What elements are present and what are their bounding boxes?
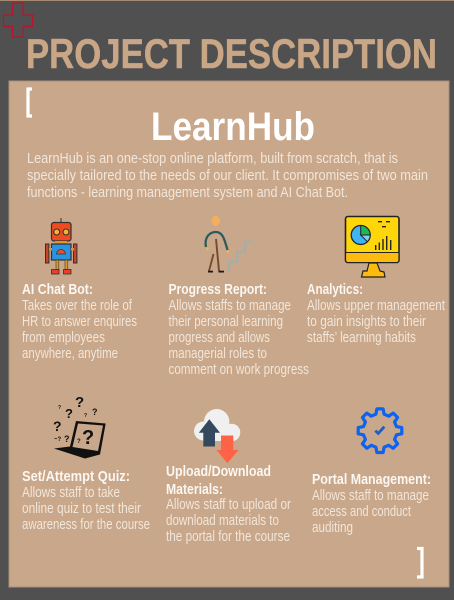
text block: Set/Attempt Quiz: Allows staff to take — [22, 485, 120, 501]
icon: person climbing stairs — [206, 216, 254, 272]
text block: Set/Attempt Quiz — [22, 468, 150, 533]
text block: Upload/Download Materials: download materials to — [166, 513, 279, 529]
text block: Set/Attempt Quiz: online quiz to test their — [22, 501, 141, 517]
text block: Analytics: Analytics: — [307, 281, 363, 298]
text block: Set/Attempt Quiz: Set/Attempt Quiz: — [22, 468, 130, 485]
text block: Progress Report: Allows staffs to manage — [168, 298, 291, 314]
icon: laptop with question marks: ? — [65, 406, 73, 421]
text block: Upload/Download Materials: the portal for the course — [166, 529, 290, 545]
text block: Analytics: to gain insights to their — [307, 314, 426, 330]
icon: laptop with question marks: ? — [53, 418, 62, 434]
text block: Set/Attempt Quiz: awareness for the course — [22, 517, 150, 533]
text block: introduction — [27, 151, 428, 201]
icon: laptop with question marks: ~? — [54, 437, 62, 443]
text block: Upload/Download Materials: Allows staff to upload or — [166, 497, 291, 513]
text block: introduction: functions - learning management system and AI Chat Bot. — [27, 185, 348, 201]
text block: Upload/Download Materials: Upload/Download — [166, 463, 271, 480]
icon: laptop with question marks: ? — [58, 405, 61, 411]
text block: Portal Management: Portal Management: — [312, 471, 431, 488]
text block: Analytics: staffs’ learning habits — [307, 330, 416, 346]
closing bracket — [417, 548, 422, 577]
text block: Progress Report: progress and allows — [168, 330, 270, 346]
icon: laptop with question marks: ? — [84, 413, 87, 419]
text block: AI Chat Bot: from employees — [22, 330, 105, 346]
text block: AI Chat Bot — [22, 281, 137, 362]
text block: Progress Report: Progress Report: — [168, 281, 267, 298]
icon: laptop with question marks — [53, 394, 106, 458]
icon: robot — [46, 218, 77, 274]
icon: analytics monitor — [346, 216, 399, 277]
text block: introduction: LearnHub is an one-stop online platform, built from scratch, that is — [27, 151, 398, 167]
text block: AI Chat Bot: AI Chat Bot: — [22, 281, 93, 298]
text block: Progress Report: comment on work progress — [168, 362, 309, 378]
text block: Analytics — [307, 281, 445, 346]
text block: Progress Report: their personal learning — [168, 314, 283, 330]
icon: cloud upload and download — [194, 409, 240, 463]
opening bracket — [28, 89, 32, 116]
text block: Portal Management: access and conduct — [312, 504, 411, 520]
icon: red cross outline — [4, 3, 32, 37]
icon: laptop with question marks: ? — [75, 394, 84, 411]
text block: AI Chat Bot: HR to answer enquires — [22, 314, 137, 330]
text block: Portal Management — [312, 471, 431, 536]
heading: LearnHub: LearnHub — [151, 105, 315, 149]
icon: laptop with question marks: ? — [82, 427, 94, 449]
icon: laptop with question marks: ? — [77, 439, 81, 445]
text block: Progress Report — [168, 281, 309, 378]
icon: laptop with question marks: ? — [92, 407, 98, 417]
text block: Upload/Download Materials: Materials: — [166, 481, 223, 498]
icon: laptop with question marks: ? — [64, 434, 70, 444]
text block: AI Chat Bot: Takes over the role of — [22, 298, 133, 314]
text block: Upload/Download Materials — [166, 463, 291, 545]
icon: gear with check — [358, 409, 402, 452]
text block: AI Chat Bot: anywhere, anytime — [22, 346, 118, 362]
text block: Progress Report: managerial roles to — [168, 346, 267, 362]
text block: Portal Management: auditing — [312, 520, 353, 536]
